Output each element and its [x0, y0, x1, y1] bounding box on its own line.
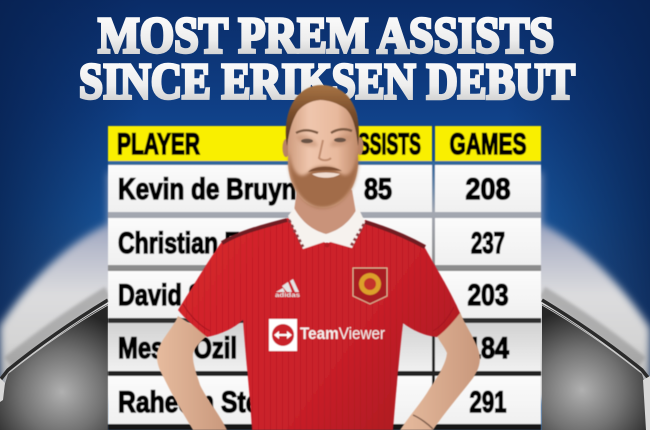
row: David Silva: [108, 271, 541, 318]
shirt shoulder trim: [222, 220, 425, 247]
eye socket shading: [296, 135, 352, 147]
left arm: [157, 316, 227, 430]
row: Christian Eriksen: Christian Eriksen: [118, 227, 308, 260]
row: Mesut Ozil: [108, 323, 541, 371]
shirt sleeve cuffs: [183, 304, 454, 331]
ear right: [356, 137, 364, 155]
row: Christian Eriksen: 237: [471, 227, 505, 260]
table header row: PLAYER: [117, 128, 200, 161]
title: MOST PREM ASSISTS: [98, 8, 554, 64]
face: [288, 92, 358, 208]
row: Kevin de Bruyne: 85: [364, 173, 392, 206]
club crest: [353, 268, 387, 304]
neck: [292, 190, 358, 240]
table header row: GAMES: [450, 128, 526, 161]
row: Mesut Ozil: Mesut Ozil: [118, 332, 237, 365]
row: Raheem Sterling: [108, 376, 541, 424]
right arm: [400, 312, 480, 430]
eyebrow right: [331, 129, 352, 133]
row: David Silva: David Silva: [118, 279, 243, 312]
collar button: [325, 243, 329, 247]
football right dark panel: [542, 304, 650, 430]
nose shadow: [319, 140, 331, 160]
collar: [288, 207, 365, 249]
eye right: [334, 138, 346, 142]
sponsor logo: TeamViewer: TeamViewer: [300, 324, 385, 343]
title: [79, 8, 575, 110]
row: Kevin de Bruyne: 208: [466, 173, 510, 206]
wristband: [413, 415, 433, 429]
ear left: [282, 139, 290, 157]
hair: [286, 85, 359, 146]
shirt pinstripes: [178, 218, 460, 430]
row: Kevin de Bruyne: Kevin de Bruyne: [118, 173, 310, 206]
row: Mesut Ozil: 184: [467, 332, 509, 365]
table: [108, 126, 541, 430]
shirt: [178, 218, 460, 430]
row: Christian Eriksen: [108, 218, 541, 265]
football white panel: [0, 172, 650, 400]
row: Kevin de Bruyne: [108, 165, 541, 212]
adidas logo: adidas: [275, 293, 301, 299]
football seams: [0, 292, 650, 380]
beard: [289, 150, 358, 208]
football background: [0, 172, 650, 430]
table backing: [108, 161, 541, 430]
row: Raheem Sterling: 291: [470, 386, 506, 419]
sponsor logo: TeamViewer: [269, 319, 385, 351]
football left dark panel: [0, 304, 108, 430]
eyebrow left: [296, 130, 318, 133]
mouth: [312, 172, 340, 178]
row: Raheem Sterling: Raheem Sterling: [118, 386, 313, 419]
adidas logo: [275, 279, 301, 299]
moustache: [308, 167, 342, 172]
football corner panels: [0, 376, 650, 430]
table header row: [108, 126, 541, 161]
head: [282, 85, 364, 208]
table header row: ASSISTS: [345, 128, 421, 161]
eye left: [301, 139, 313, 143]
player figure: [157, 85, 480, 430]
row: David Silva: 203: [468, 279, 508, 312]
title: SINCE ERIKSEN DEBUT: [79, 54, 575, 110]
